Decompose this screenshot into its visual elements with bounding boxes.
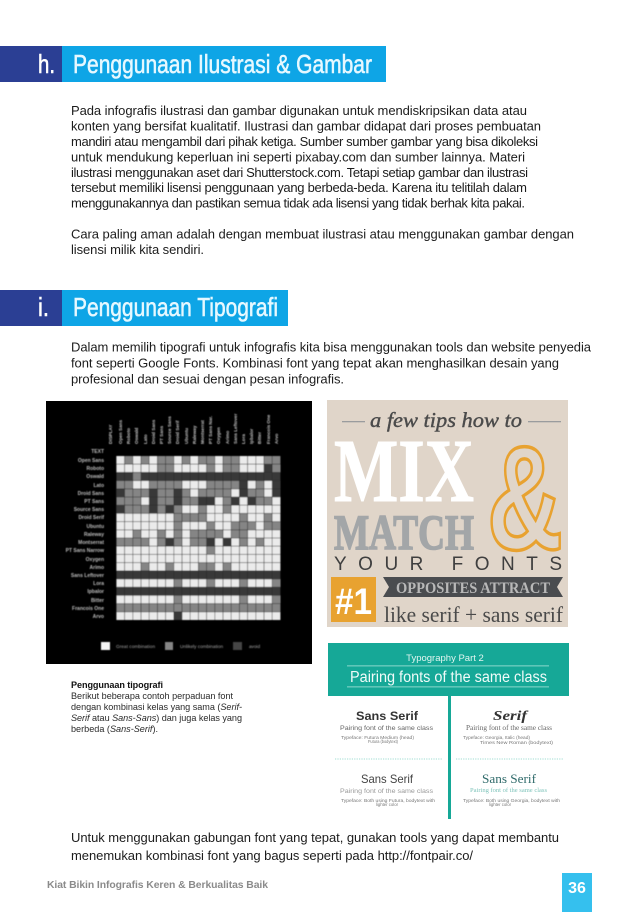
row labels: Arvo (93, 614, 104, 620)
heading: section i: i. (38, 292, 49, 322)
text block: safe approach: lisensi milik kita sendiri. (71, 242, 204, 257)
column labels: Source Sans (167, 416, 172, 444)
column labels: Arimo (225, 431, 230, 444)
sample: serif italic (463, 709, 554, 745)
column labels: Ubuntu (184, 428, 189, 444)
heading: section h: Penggunaan Ilustrasi & Gambar (73, 49, 372, 79)
illustration: mix and match fonts poster (327, 400, 568, 627)
illustration: mix and match fonts poster: YOUR FONTS (334, 554, 562, 575)
text block: safe approach: Cara paling aman adalah dengan membuat ilustrasi atau menggunakan gambar dengan (71, 226, 574, 242)
column labels: Roboto (126, 428, 131, 444)
illustration: pairing fonts of the same class: Pairing fonts of the same class (350, 669, 547, 686)
illustration: mix and match fonts poster: & (487, 416, 563, 581)
matrix legend: Unlikely combination (180, 644, 223, 649)
row labels: Open Sans (78, 458, 104, 464)
row labels: Roboto (86, 466, 104, 472)
sample: sans serif bold: Pairing font of the same class (340, 725, 434, 732)
column labels: Lora (241, 434, 246, 444)
sample: serif teal: Sans Serif (482, 771, 537, 786)
row labels: Ubuntu (86, 524, 104, 530)
text block: illustration paragraph: untuk mendukung keperluan ini seperti pixabay.com dan sumber lainnya. Materi (71, 150, 525, 164)
caption: typography note (71, 680, 242, 734)
sample: sans serif bold (340, 709, 434, 744)
sample: serif italic: Pairing font of the same class (466, 725, 552, 732)
sample: serif italic: Serif (493, 709, 529, 724)
caption: typography note: Penggunaan tipografi (71, 680, 163, 690)
illustration: pairing fonts of the same class (328, 643, 569, 819)
chart: font combination matrix (46, 401, 312, 664)
column labels: Ipbalor (249, 428, 254, 444)
caption: typography note: dengan kombinasi kelas yang sama (Serif- (71, 702, 242, 712)
sample: sans serif bold: Sans Serif (356, 709, 419, 723)
column labels: DISPLAY (108, 424, 113, 444)
text block: fontpair tip: menemukan kombinasi font yang bagus seperti pada http://fontpair.co/ (71, 848, 473, 863)
text block: fontpair tip (71, 830, 559, 863)
sample: sans serif bold: Futura (bodytext) (368, 739, 398, 744)
text block: typography paragraph: font seperti Google Fonts. Kombinasi font yang tepat akan menghasilkan desain yang (71, 356, 559, 370)
column labels: PT Sans Nar. (208, 416, 213, 444)
text block: illustration paragraph: menggunakannya dan pastikan semua tidak ada lisensi yang tidak berhak kita pakai. (71, 196, 525, 210)
sample: sans serif light: Pairing font of the same class (340, 788, 434, 795)
caption: typography note: berbeda (Sans-Serif). (71, 724, 158, 734)
row labels: TEXT (91, 449, 104, 455)
row labels: Oswald (86, 474, 104, 480)
row labels: Droid Serif (78, 515, 104, 521)
text block: illustration paragraph: mandiri atau mengambil dari pihak ketiga. Sumber sumber gambar yang bisa dikoleksi (71, 134, 538, 149)
text block: illustration paragraph: Pada infografis ilustrasi dan gambar digunakan untuk mendiskripsikan data atau (71, 103, 527, 118)
illustration: mix and match fonts poster: like serif + sans serif (384, 602, 564, 627)
text block: fontpair tip: Untuk menggunakan gabungan font yang tepat, gunakan tools yang dapat membantu (71, 830, 559, 845)
heading: section i: Penggunaan Tipografi (73, 292, 278, 322)
matrix legend (101, 642, 260, 650)
matrix cells (116, 456, 280, 620)
row labels: Raleway (84, 532, 104, 538)
heading: section h: h. (38, 49, 55, 79)
sample: serif teal: Typeface: Both using Georgia, bodytext with (463, 798, 561, 803)
column labels: Montserrat (200, 420, 205, 444)
heading: section i (0, 290, 288, 326)
column labels: Droid Sans (151, 419, 156, 444)
sample: serif italic: Times New Roman (bodytext) (480, 740, 554, 745)
column labels: Oswald (134, 427, 139, 444)
row labels: Francois One (72, 606, 104, 612)
text block: typography paragraph (71, 340, 592, 386)
heading: section h (0, 46, 386, 82)
sample: sans serif light (340, 772, 436, 807)
caption: typography note: Serif atau Sans-Sans) dan juga kelas yang (71, 713, 242, 723)
column labels: Raleway (192, 425, 197, 444)
row labels: Source Sans (74, 507, 104, 513)
row labels: PT Sans Narrow (66, 548, 104, 554)
illustration: pairing fonts of the same class: Typography Part 2 (406, 653, 484, 664)
text block: typography paragraph: Dalam memilih tipografi untuk infografis kita bisa menggunakan tools dan website penyedia (71, 340, 592, 354)
row labels: Arimo (90, 565, 104, 571)
column labels: Bitter (257, 432, 262, 444)
illustration: mix and match fonts poster: OPPOSITES ATTRACT (396, 580, 550, 597)
row labels: Bitter (91, 598, 104, 604)
column labels (108, 413, 279, 444)
row labels (66, 449, 104, 620)
column labels: Arvo (274, 433, 279, 444)
column labels: Open Sans (118, 420, 123, 444)
sample: sans serif bold: Typeface: Futura Medium (head) (341, 735, 415, 740)
sample: serif teal: lighter color (489, 802, 512, 807)
sample: serif teal (463, 771, 561, 807)
illustration: mix and match fonts poster: a few tips how to (370, 408, 522, 432)
text block: safe approach (71, 226, 574, 257)
sample: serif italic: Typeface: Georgia, Italic (head) (463, 735, 531, 740)
row labels: Ipbalor (87, 589, 104, 595)
row labels: Lato (93, 483, 104, 489)
row labels: Droid Sans (78, 491, 104, 497)
text block: illustration paragraph: tersebut memiliki lisensi penggunaan yang berbeda-beda. Karena itu telitilah dalam (71, 180, 527, 195)
illustration: mix and match fonts poster: MIX (334, 422, 474, 521)
page number (562, 873, 592, 912)
column labels: Francois One (266, 414, 271, 444)
matrix legend: Great combination (116, 644, 155, 649)
row labels: Sans Leftover (71, 573, 104, 579)
text block: typography paragraph: profesional dan sesuai dengan pesan infografis. (71, 372, 344, 386)
matrix legend: avoid (249, 644, 260, 649)
page number: 36 (568, 880, 586, 897)
column labels: Lato (143, 434, 148, 444)
text block: illustration paragraph: konten yang bersifat kualitatif. Ilustrasi dan gambar didapat dari proses pembuatan (71, 118, 541, 134)
caption: typography note: Berikut beberapa contoh perpaduan font (71, 691, 233, 701)
sample: sans serif light: Typeface: Both using Futura, bodytext with (341, 798, 436, 803)
row labels: Lora (93, 581, 104, 587)
sample: serif teal: Pairing font of the same class (470, 787, 547, 794)
sample: sans serif light: lighter color (376, 802, 399, 807)
row labels: Oxygen (86, 557, 104, 563)
row labels: Montserrat (78, 540, 104, 546)
sample: sans serif light: Sans Serif (361, 772, 414, 786)
footer title: Kiat Bikin Infografis Keren & Berkualitas Baik (47, 880, 268, 891)
text block: illustration paragraph (71, 103, 541, 210)
illustration: mix and match fonts poster: MATCH (334, 504, 474, 560)
row labels: PT Sans (84, 499, 104, 505)
column labels: Droid Serif (175, 420, 180, 444)
text block: illustration paragraph: ilustrasi menggunakan aset dari Shutterstock.com. Tetapi setiap gambar dan ilustrasi (71, 165, 528, 180)
column labels: PT Sans (159, 425, 164, 444)
illustration: mix and match fonts poster: #1 (335, 581, 372, 622)
column labels: Oxygen (216, 427, 221, 444)
column labels: Sans Leftover (233, 413, 238, 444)
